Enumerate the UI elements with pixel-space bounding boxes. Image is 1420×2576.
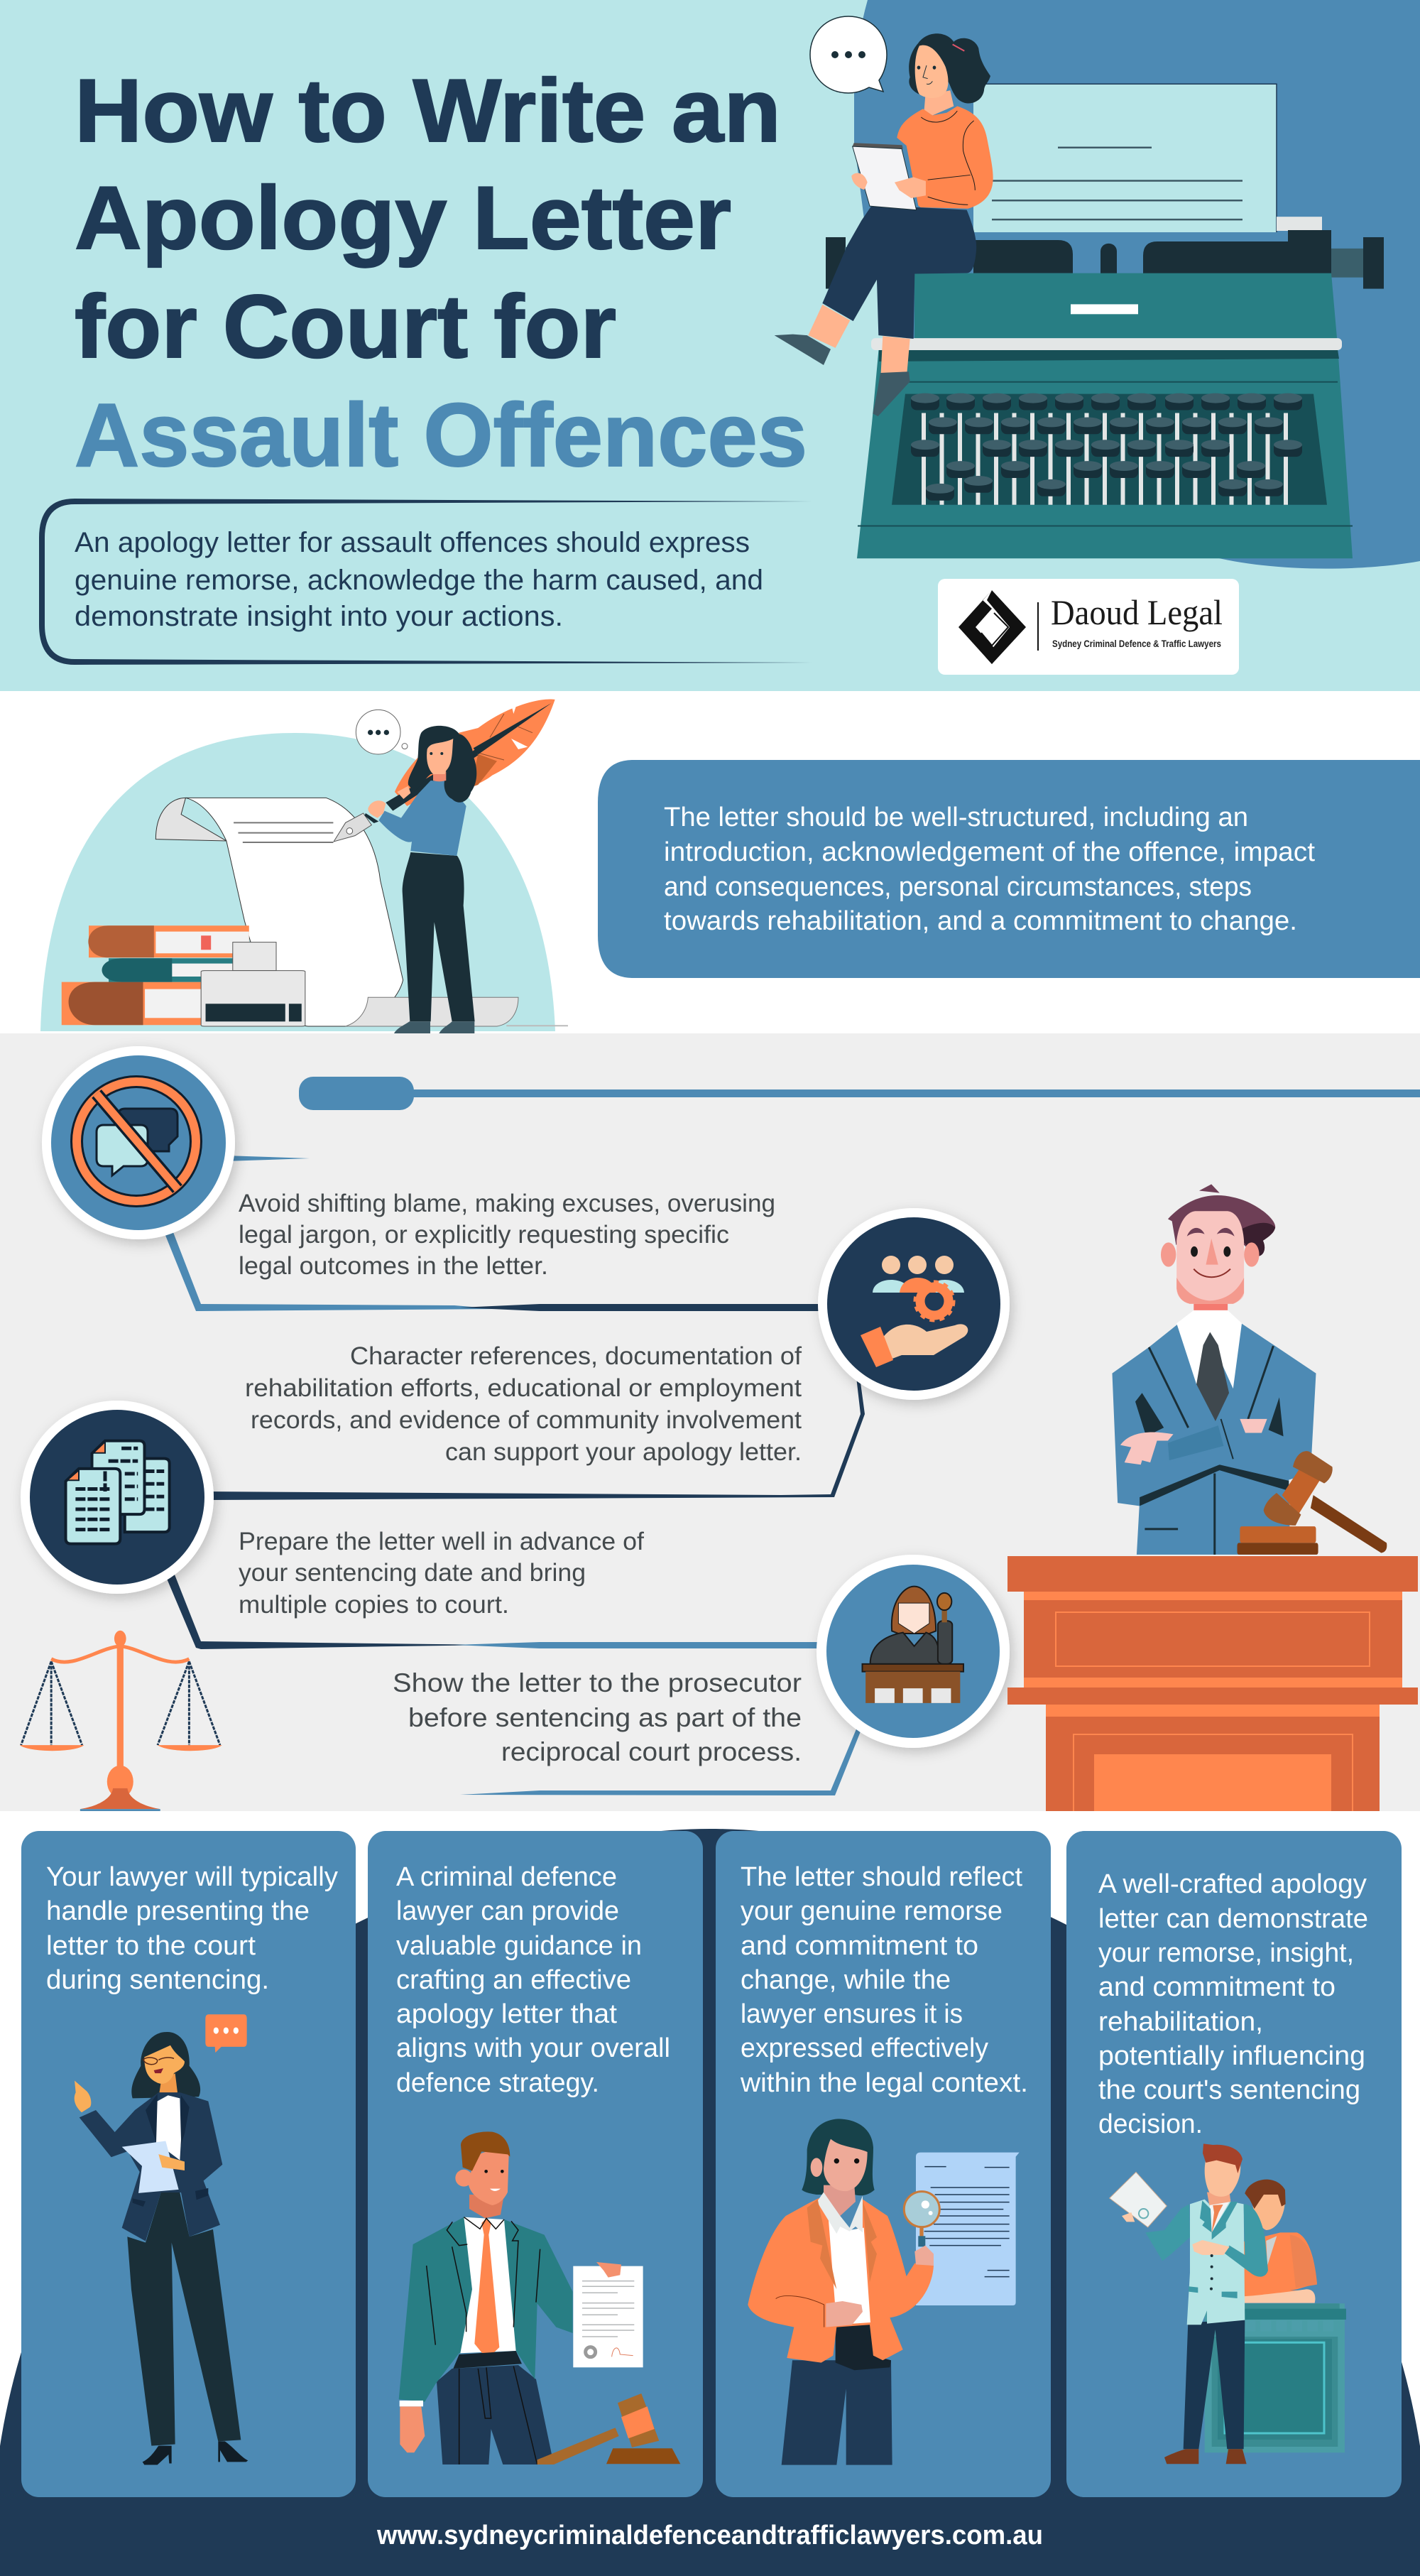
card: genuine remorse [716,1831,1051,2497]
card: well-crafted apology: decision. [1098,2109,1203,2139]
text: character references: can support your apology letter. [445,1438,802,1466]
title [75,60,807,485]
card: criminal defence lawyer guidance: defence strategy. [396,2068,599,2098]
card: lawyer presenting the letter: Your lawyer will typically [46,1862,338,1892]
logo: Daoud Legal: Daoud Legal [1051,592,1223,632]
card: genuine remorse: The letter should reflect [741,1862,1022,1892]
card: genuine remorse: and commitment to [741,1931,978,1961]
card: lawyer presenting the letter: letter to the court [46,1931,256,1961]
logo: Daoud Legal: Sydney Criminal Defence & Traffic Lawyers [1052,638,1221,649]
card: well-crafted apology: and commitment to [1098,1972,1336,2002]
panel: what to avoid and include [0,1033,1420,1814]
text: prepare in advance [239,1528,644,1619]
text: avoid shifting blame: legal jargon, or explicitly requesting specific [239,1221,729,1249]
icon: judge at bench [816,1555,1010,1748]
callout: summary frame and text [39,499,816,665]
callout: structure text card [598,760,1420,978]
callout: summary frame and text: genuine remorse, acknowledge the harm caused, and [75,565,763,596]
illustration: wooden podium [1007,1556,1418,1811]
card: criminal defence lawyer guidance: crafting an effective [396,1965,631,1995]
card: genuine remorse: expressed effectively [741,2033,988,2063]
icon: speech bubble [810,16,887,93]
text: show the prosecutor: before sentencing as part of the [408,1703,802,1732]
card: criminal defence lawyer guidance: lawyer can provide [396,1896,619,1926]
callout: structure text card: towards rehabilitation, and a commitment to change. [664,906,1297,936]
card: well-crafted apology: the court's sentencing [1098,2075,1360,2105]
callout: structure text card: and consequences, personal circumstances, steps [664,872,1252,902]
connector lines [163,1156,865,1795]
panel: lawyer guidance cards [0,1811,1420,2576]
icon: community support hand and gear [818,1208,1010,1400]
card: well-crafted apology: letter can demonstrate [1098,1904,1368,1934]
text: show the prosecutor: Show the letter to the prosecutor [393,1668,802,1697]
card: criminal defence lawyer guidance: apology letter that [396,1999,617,2029]
card: well-crafted apology: A well-crafted apology [1098,1869,1367,1899]
panel: hero header [0,0,1420,691]
footer website: www.sydneycriminaldefenceandtrafficlawyers.com.au [376,2521,1043,2550]
title: Apology Letter [75,168,731,268]
card: well-crafted apology [1066,1831,1402,2497]
card: criminal defence lawyer guidance: aligns with your overall [396,2033,670,2063]
illustration: typewriter [826,84,1384,558]
card: lawyer presenting the letter [21,1831,356,2497]
title: Assault Offences [75,385,807,485]
text: avoid shifting blame: legal outcomes in the letter. [239,1252,548,1280]
card: criminal defence lawyer guidance [368,1831,703,2497]
text: character references: records, and evidence of community involvement [251,1406,802,1434]
text: character references: Character references, documentation of [350,1342,802,1370]
panel: structure of the letter [0,691,1420,1033]
card: genuine remorse: your genuine remorse [741,1896,1003,1926]
text: show the prosecutor [393,1668,802,1766]
text: avoid shifting blame [239,1190,775,1280]
text: prepare in advance: multiple copies to court. [239,1591,509,1619]
card: lawyer presenting the letter: handle presenting the [46,1896,310,1926]
card: genuine remorse: change, while the [741,1965,951,1995]
icon: document copies [21,1401,214,1594]
logo: Daoud Legal [938,579,1239,675]
illustration: male lawyer with document and gavel [399,2131,680,2464]
card: well-crafted apology: potentially influencing [1098,2041,1365,2071]
icon: no blame speech bubbles [42,1046,235,1239]
callout: structure text card: The letter should be well-structured, including an [664,803,1248,832]
title: How to Write an [75,60,781,161]
text: character references [245,1342,802,1466]
card: criminal defence lawyer guidance: A criminal defence [396,1862,617,1892]
card: well-crafted apology: your remorse, insight, [1098,1938,1354,1968]
illustration: woman inspecting document [748,2119,1020,2465]
card: genuine remorse: within the legal context. [740,2068,1028,2098]
illustration: woman sitting on typewriter [775,33,993,416]
text: character references: rehabilitation efforts, educational or employment [245,1374,802,1402]
top decorative pill [299,1077,1420,1110]
text: prepare in advance: your sentencing date and bring [239,1559,586,1587]
card: criminal defence lawyer guidance: valuable guidance in [396,1931,642,1961]
callout: structure text card: introduction, acknowledgement of the offence, impact [664,837,1315,867]
card: genuine remorse: lawyer ensures it is [741,1999,963,2029]
card: well-crafted apology: rehabilitation, [1098,2007,1263,2037]
text: prepare in advance: Prepare the letter well in advance of [239,1528,644,1555]
card: lawyer presenting the letter: during sentencing. [46,1965,269,1995]
illustration: lawyer with arms crossed and gavel [1112,1184,1387,1555]
callout: summary frame and text: An apology letter for assault offences should express [75,527,750,558]
icon: scales of justice [20,1631,222,1814]
illustration: lawyer and client at dock [1110,2143,1346,2464]
illustration: writer with scroll, books and quill [40,699,568,1033]
illustration: woman lawyer with paper [75,2014,248,2465]
title: for Court for [75,276,616,376]
text: avoid shifting blame: Avoid shifting blame, making excuses, overusing [239,1190,775,1217]
callout: summary frame and text: demonstrate insight into your actions. [75,601,563,632]
text: show the prosecutor: reciprocal court process. [501,1737,802,1766]
